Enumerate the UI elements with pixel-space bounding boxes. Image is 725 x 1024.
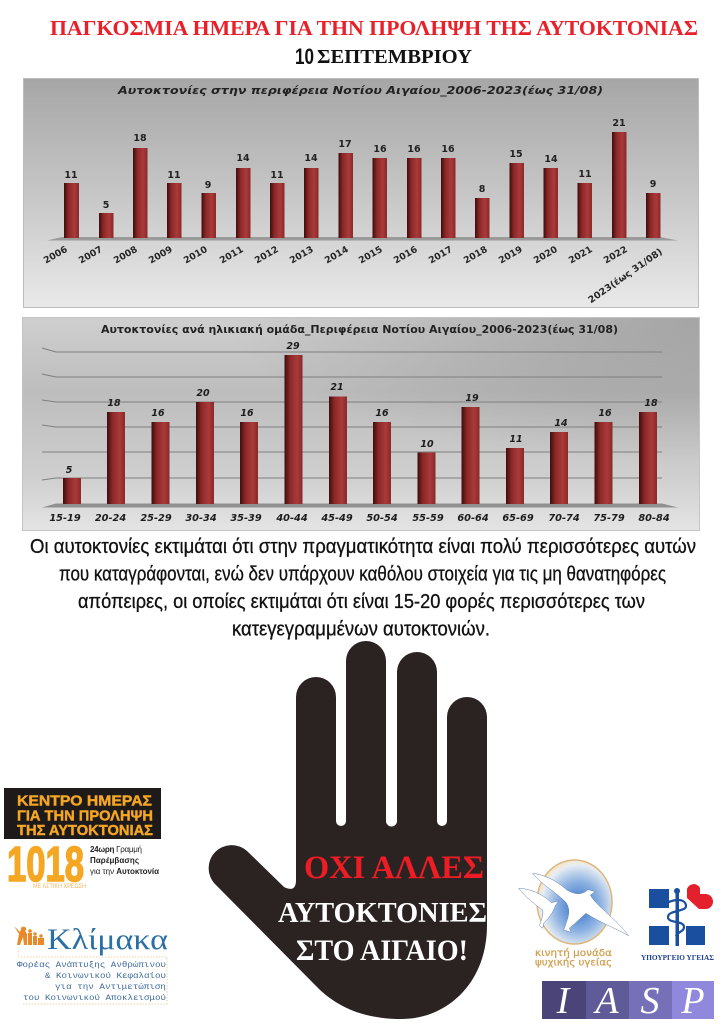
- slogan line 2: ΑΥΤΟΚΤΟΝΙΕΣ: [278, 897, 487, 929]
- bar value labels: 21: [612, 118, 626, 129]
- chart floor: [47, 237, 678, 240]
- bar value labels: 20: [196, 388, 210, 399]
- logo: day centre 1018 helpline: για την Αυτοκτονία: [90, 867, 159, 876]
- age group axis labels: 70-74: [548, 513, 580, 524]
- age group axis labels: 20-24: [95, 513, 126, 524]
- age group axis labels: 75-79: [593, 513, 625, 524]
- paragraph: explanatory text: [30, 536, 696, 640]
- logo: day centre 1018 helpline: 1018: [7, 838, 84, 892]
- logo: IASP: A: [592, 980, 619, 1022]
- gridlines: [42, 348, 678, 508]
- age group axis labels: 60-64: [457, 513, 489, 524]
- logo: mobile mental health unit: ψυχικής υγείας: [535, 958, 612, 968]
- bar value labels: 5: [103, 200, 109, 211]
- logo: day centre 1018 helpline: 24ωρη Γραμμή: [90, 845, 142, 854]
- paragraph: explanatory text: απόπειρες, οι οποίες εκτιμάται ότι είναι 15-20 φορές περισσότερες των: [78, 591, 645, 613]
- logo: Klimaka: για την Αντιμετώπιση: [55, 982, 166, 992]
- bars by year: [64, 132, 660, 238]
- age group axis labels: 80-84: [638, 513, 670, 524]
- logo: IASP: [542, 980, 714, 1022]
- logo: day centre 1018 helpline: ΓΙΑ ΤΗΝ ΠΡΟΛΗΨΗ: [17, 808, 153, 824]
- slogan line 3: ΣΤΟ ΑΙΓΑΙΟ!: [296, 934, 468, 967]
- bar value labels: 10: [420, 439, 434, 450]
- logo: Klimaka: [14, 923, 168, 1004]
- icon: stop hand with slogan: [209, 641, 487, 1019]
- year axis labels: 2016: [392, 244, 420, 266]
- year axis labels: 2015: [357, 244, 384, 266]
- logo: Klimaka: Φορέας Ανάπτυξης Ανθρώπινου: [17, 960, 166, 970]
- bar value labels: 16: [598, 408, 612, 419]
- icon: red heart: [687, 884, 713, 909]
- logo: Klimaka: Κλίμακα: [47, 923, 168, 956]
- logo: day centre 1018 helpline: ΜΕ ΑΣΤΙΚΗ ΧΡΕΩΣΗ: [33, 884, 86, 890]
- bar value labels: 16: [441, 144, 455, 155]
- bar value labels: 5: [66, 465, 73, 476]
- slogan line 1: ΟΧΙ ΑΛΛΕΣ: [304, 850, 484, 886]
- bar value labels: 18: [107, 398, 121, 409]
- bar value labels: 14: [554, 418, 568, 429]
- year axis labels: 2017: [427, 244, 454, 266]
- year axis labels: 2023(έως 31/08): [586, 246, 665, 306]
- bar value labels: 16: [240, 408, 254, 419]
- year axis labels: 2019: [497, 244, 524, 266]
- logo: day centre 1018 helpline: [4, 788, 161, 892]
- bar value labels: 11: [509, 434, 523, 445]
- age group axis labels: 65-69: [502, 513, 534, 524]
- age group axis labels: 15-19: [49, 513, 81, 524]
- age group axis labels: 50-54: [366, 513, 398, 524]
- year axis labels: 2020: [532, 244, 560, 266]
- age group axis labels: 45-49: [320, 513, 353, 524]
- bar value labels: 8: [479, 184, 486, 195]
- logo: Klimaka: του Κοινωνικού Αποκλεισμού: [23, 993, 166, 1003]
- logo: day centre 1018 helpline: ΤΗΣ ΑΥΤΟΚΤΟΝΙΑΣ: [17, 823, 153, 839]
- bar value labels: 21: [330, 382, 344, 393]
- year axis labels: 2012: [253, 244, 280, 266]
- logo: IASP: P: [680, 980, 705, 1022]
- bar value labels: 18: [644, 398, 658, 409]
- bar value labels: 11: [270, 170, 284, 181]
- bar value labels: 16: [407, 144, 421, 155]
- year axis labels: 2021: [567, 244, 594, 266]
- year axis labels: 2011: [218, 244, 246, 266]
- bar value labels: 9: [205, 180, 211, 191]
- panel: suicides per age group chart: [22, 318, 700, 530]
- age group axis labels: 30-34: [185, 513, 217, 524]
- chart title: Αυτοκτονίες στην περιφέρεια Νοτίου Αιγαίου_2006-2023(έως 31/08): [117, 85, 603, 97]
- bars by age group: [63, 355, 657, 504]
- age group axis labels: 55-59: [412, 513, 444, 524]
- year axis labels: 2006: [42, 244, 70, 266]
- bar value labels: 9: [650, 179, 656, 190]
- logo: mobile mental health unit: [519, 860, 629, 968]
- bar value labels: 14: [304, 153, 318, 164]
- bar value labels: 16: [375, 408, 389, 419]
- bar value labels: 14: [544, 154, 558, 165]
- subtitle: date: ΣΕΠΤΕΜΒΡΙΟΥ: [317, 46, 473, 68]
- logo: day centre 1018 helpline: Παρέμβασης: [90, 856, 139, 865]
- bar value labels: 11: [167, 170, 181, 181]
- bar value labels: 11: [578, 169, 592, 180]
- icon: orange people: [14, 926, 44, 945]
- paragraph: explanatory text: κατεγεγραμμένων αυτοκτονιών.: [232, 618, 490, 640]
- subtitle: date: 10: [295, 44, 314, 69]
- year axis labels: 2013: [288, 244, 316, 266]
- logo: day centre 1018 helpline: ΚΕΝΤΡΟ ΗΜΕΡΑΣ: [17, 794, 152, 810]
- logo: mobile mental health unit: κινητή μονάδα: [535, 948, 612, 959]
- age group axis labels: 40-44: [275, 513, 308, 524]
- bar value labels: 29: [286, 341, 300, 352]
- title: ΠΑΓΚΟΣΜΙΑ ΗΜΕΡΑ ΓΙΑ ΤΗΝ ΠΡΟΛΗΨΗ ΤΗΣ ΑΥΤΟΚΤΟΝΙΑΣ: [50, 16, 698, 40]
- bar value labels: 11: [64, 170, 78, 181]
- bar value labels: 14: [236, 153, 250, 164]
- panel: suicides per year chart: [24, 78, 698, 308]
- year axis labels: [42, 244, 665, 306]
- logo: IASP: S: [640, 980, 660, 1022]
- bar value labels: 16: [151, 408, 165, 419]
- bar value labels: 15: [509, 149, 523, 160]
- logo: Klimaka: & Κοινωνικού Κεφαλαίου: [45, 971, 166, 981]
- bar value labels: [64, 118, 656, 211]
- bar value labels: 19: [465, 393, 479, 404]
- logo: IASP: I: [556, 980, 572, 1022]
- year axis labels: 2014: [323, 244, 350, 266]
- age group axis labels: 25-29: [140, 513, 172, 524]
- year axis labels: 2008: [112, 244, 140, 266]
- bar value labels: 18: [133, 133, 147, 144]
- bar value labels: 16: [373, 144, 387, 155]
- year axis labels: 2007: [77, 244, 104, 266]
- logo: ministry of health: ΥΠΟΥΡΓΕΙΟ ΥΓΕΙΑΣ: [641, 953, 714, 962]
- age group axis labels: 35-39: [230, 513, 262, 524]
- chart title: Αυτοκτονίες ανά ηλικιακή ομάδα_Περιφέρεια Νοτίου Αιγαίου_2006-2023(έως 31/08): [101, 324, 618, 336]
- year axis labels: 2018: [462, 244, 490, 266]
- year axis labels: 2022: [602, 244, 630, 266]
- bar value labels: [66, 341, 658, 476]
- icon: birds: [519, 873, 629, 936]
- age group axis labels: [49, 513, 670, 524]
- bar value labels: 17: [338, 139, 352, 150]
- logo: ministry of health: [641, 884, 714, 962]
- year axis labels: 2009: [147, 244, 174, 266]
- year axis labels: 2010: [182, 244, 210, 266]
